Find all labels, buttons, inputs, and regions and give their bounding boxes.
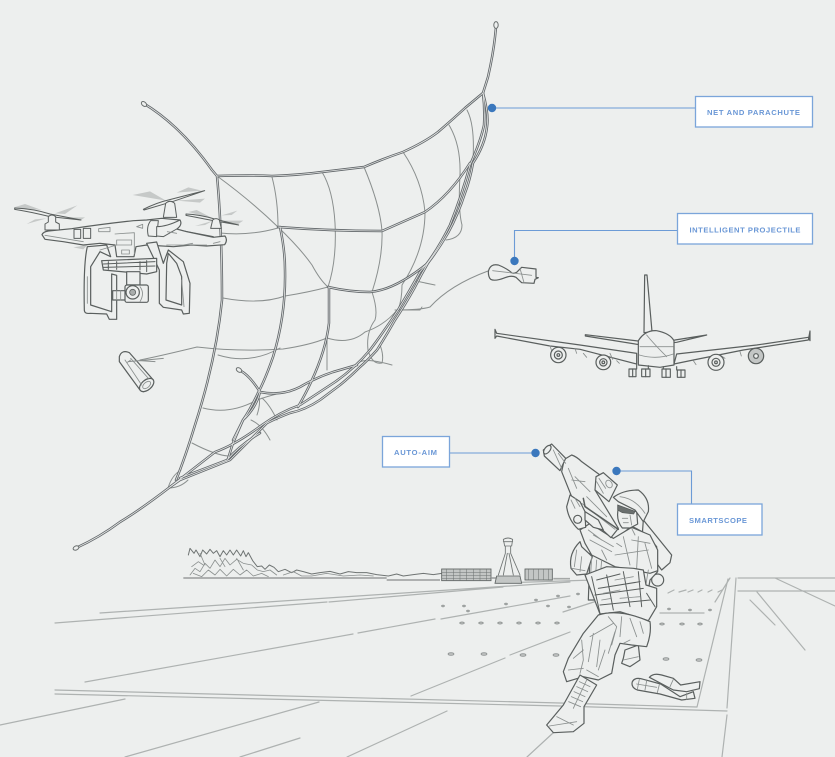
callout: net and parachute: NET AND PARACHUTE	[707, 108, 800, 117]
thin net mesh	[140, 110, 488, 488]
launcher	[542, 444, 618, 538]
fuselage	[638, 331, 674, 367]
callout: smartscope: SMARTSCOPE	[689, 516, 747, 525]
propeller blur	[14, 187, 243, 249]
boot laces	[549, 680, 590, 726]
fin	[644, 275, 652, 333]
heavy ropes: light core	[76, 27, 496, 548]
callout: net and parachute	[488, 96, 812, 127]
trouser folds	[568, 617, 643, 677]
smartscope	[595, 473, 617, 502]
backpack tube	[642, 520, 672, 570]
wing pylons	[550, 346, 741, 365]
net canister	[119, 352, 163, 394]
soldier	[542, 444, 700, 733]
terminal building	[442, 569, 491, 581]
torso back	[588, 526, 658, 600]
tree line	[183, 548, 570, 580]
drone	[14, 187, 243, 319]
landing legs	[84, 242, 190, 319]
body details	[45, 224, 220, 254]
callout: auto-aim	[382, 436, 540, 467]
airplane	[495, 275, 810, 377]
callout: smartscope	[612, 467, 762, 535]
wings	[495, 329, 810, 364]
intelligent projectile	[488, 265, 538, 283]
legs	[563, 613, 650, 682]
near arm and shoulder	[580, 523, 658, 573]
ammo vest	[585, 567, 657, 621]
callout: auto-aim: AUTO-AIM	[394, 448, 437, 457]
landing gear	[629, 365, 685, 377]
arm rear strut	[170, 228, 213, 237]
body	[42, 218, 226, 257]
hands	[567, 495, 603, 530]
propellers	[15, 191, 239, 225]
head with helmet and goggles	[613, 490, 649, 535]
soldier lower body	[547, 567, 657, 733]
engines	[551, 347, 764, 370]
rear boot	[622, 645, 640, 667]
runway ground markings	[0, 578, 835, 757]
hangar	[525, 569, 552, 580]
airport skyline: tree line, terminal and control tower	[183, 538, 570, 583]
rope end loops	[72, 22, 498, 551]
gimbal and camera	[102, 258, 157, 302]
front boot	[547, 675, 597, 733]
callout: intelligent projectile: INTELLIGENT PROJECTILE	[690, 226, 800, 234]
projectiles on the ground	[632, 674, 700, 700]
callout: intelligent projectile	[510, 214, 812, 265]
motor hubs	[45, 201, 221, 238]
control tower	[495, 538, 522, 583]
net and parachute	[72, 22, 498, 551]
soldier upper body	[542, 444, 672, 600]
far elbow	[571, 542, 592, 575]
heavy ropes: dark underlay	[76, 27, 496, 548]
